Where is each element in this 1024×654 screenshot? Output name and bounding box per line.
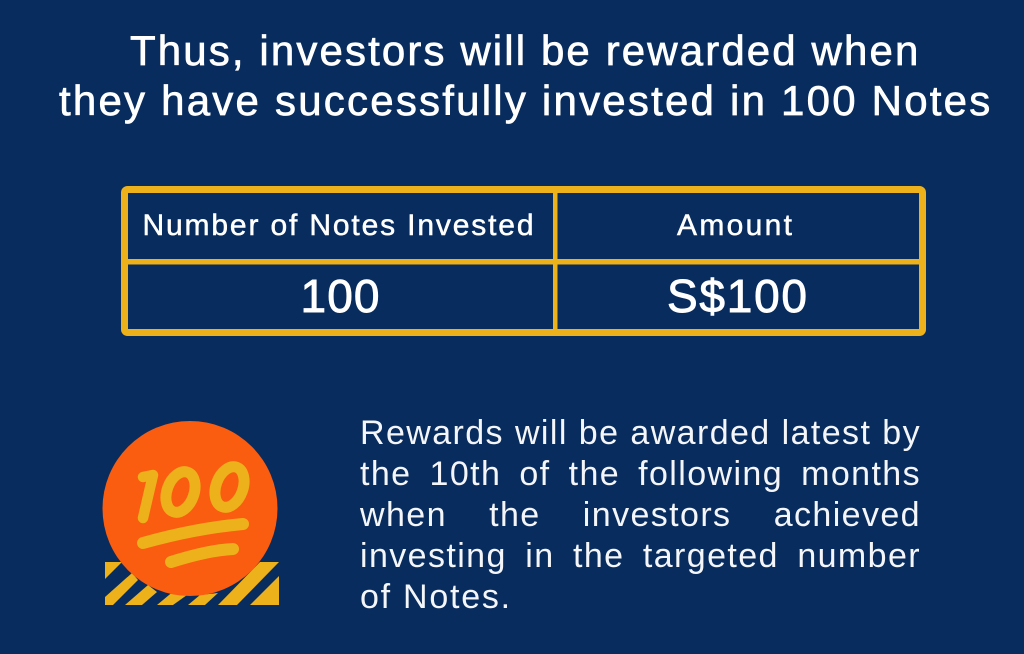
value: S$100: S$100 [667,270,807,322]
value: 100 notes: 100 [300,270,380,322]
orange circle [102,421,278,596]
hazard stripes [105,562,279,605]
header: amount: Amount [677,209,793,242]
header: number of notes invested: Number of Notes Invested [142,209,534,242]
reward timing text: Rewards will be awarded latest by [360,414,921,452]
reward timing text: investing in the targeted number [360,537,921,575]
100 and underlines [143,463,249,562]
rewards table [121,186,926,336]
reward timing text: when the investors achieved [360,496,921,534]
reward timing text: of Notes. [360,578,512,616]
reward timing text: the 10th of the following months [360,455,921,493]
title: they have successfully invested in 100 Notes [59,77,992,124]
title: Thus, investors will be rewarded when [130,27,920,74]
reward timing text [360,414,921,616]
icon: 100 points emoji [102,421,279,605]
title [59,27,992,124]
